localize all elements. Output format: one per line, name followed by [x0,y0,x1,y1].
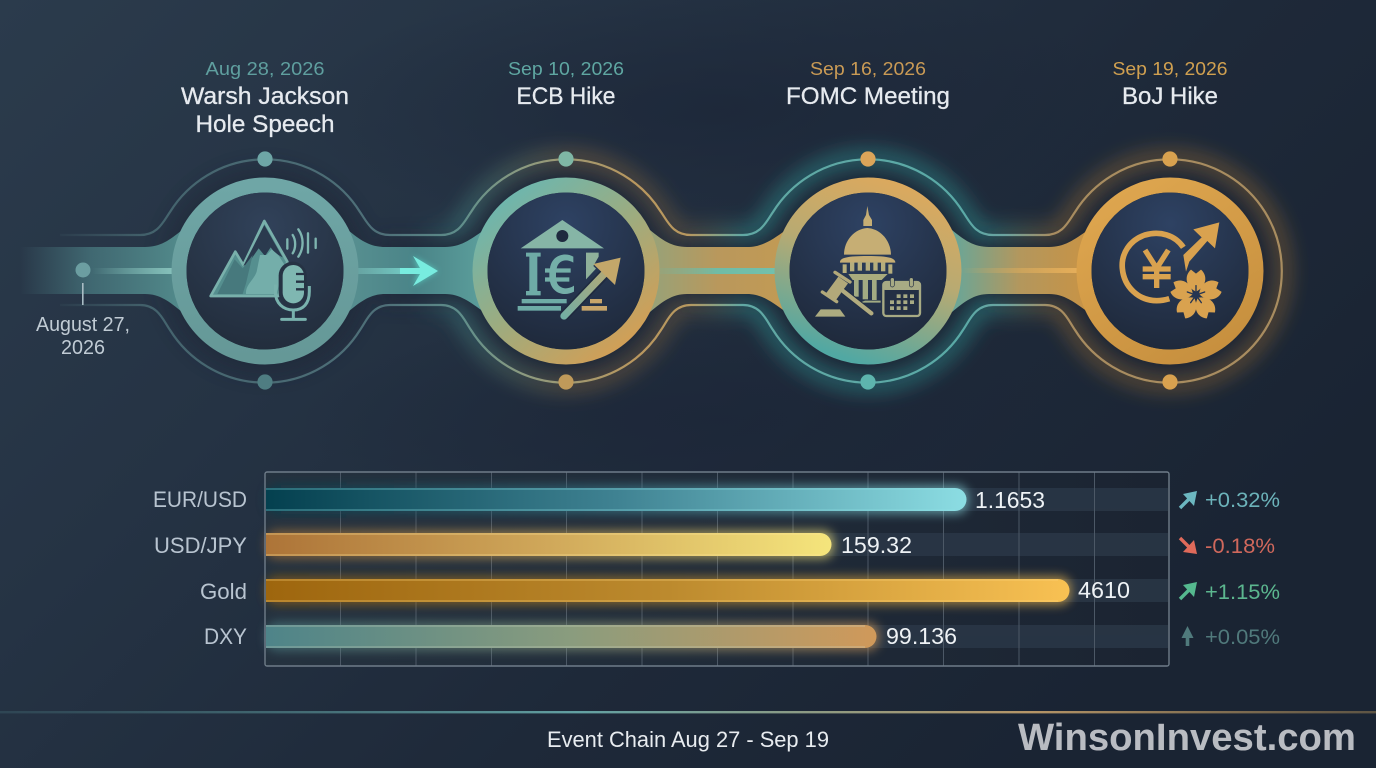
bar glows [266,485,1071,651]
change: USD/JPY: -0.18% [1205,535,1275,558]
event heading: BoJ Hike: Sep 19, 2026 [1112,58,1228,79]
bar: Gold [266,579,1070,602]
event heading: FOMC Meeting [786,58,950,110]
row labels: Gold [200,579,247,604]
bar: EUR/USD [266,488,966,511]
bar values: 159.32 [841,532,912,558]
icon: bank, euro and rising arrow [518,220,621,317]
event heading: Warsh Jackson Hole Speech [181,58,349,138]
footer caption: Event Chain Aug 27 - Sep 19 [547,727,829,752]
icon: mountain and microphone [211,221,316,319]
event heading: BoJ Hike: BoJ Hike [1122,83,1218,110]
event heading: ECB Hike: Sep 10, 2026 [508,58,624,79]
node 1: Warsh Jackson Hole Speech [179,151,351,390]
start date label [36,314,130,359]
node 2: ECB Hike [480,151,652,390]
bar values: 1.1653 [975,487,1045,513]
change: DXY: +0.05% [1205,626,1280,649]
row labels: USD/JPY [154,533,247,558]
event chain timeline [20,151,1282,390]
event heading: ECB Hike: ECB Hike [516,83,616,110]
arrow [400,256,438,286]
node 4: BoJ Hike [1084,151,1256,390]
icon: yen, arrow and sakura [1122,222,1223,321]
bar values [841,487,1130,649]
event heading: BoJ Hike [1112,58,1228,110]
bar values: 99.136 [886,623,957,649]
change: Gold: +1.15% [1205,581,1280,604]
event heading: Warsh Jackson Hole Speech: Warsh Jackson [181,83,349,110]
connector bands [20,230,1088,312]
dark inner shadows [162,168,1273,374]
start marker [76,262,90,305]
event heading: Warsh Jackson Hole Speech: Hole Speech [196,111,334,138]
start date label: August 27, [36,314,130,336]
event heading: ECB Hike [508,58,624,110]
chart frame [265,472,1169,666]
bar: DXY [266,625,876,648]
change: EUR/USD: +0.32% [1205,489,1280,512]
start date label: 2026 [61,337,105,359]
bar values: 4610 [1078,577,1130,603]
bar: USD/JPY [266,533,832,556]
event heading: FOMC Meeting: Sep 16, 2026 [810,58,926,79]
icon: capitol, gavel and calendar [815,206,920,317]
row labels: DXY [204,624,247,649]
row labels [153,487,247,649]
halo glow [60,159,1282,383]
watermark: WinsonInvest.com [1018,717,1356,759]
node 3: FOMC Meeting [782,151,954,390]
footer divider [0,711,1376,713]
row labels: EUR/USD [153,487,247,512]
row tracks [266,488,1168,648]
event heading: Warsh Jackson Hole Speech: Aug 28, 2026 [206,58,324,79]
bar chart: market levels [265,472,1169,666]
event heading: FOMC Meeting: FOMC Meeting [786,83,950,110]
connector center lines [92,268,1080,274]
halo track lines [60,159,1282,383]
